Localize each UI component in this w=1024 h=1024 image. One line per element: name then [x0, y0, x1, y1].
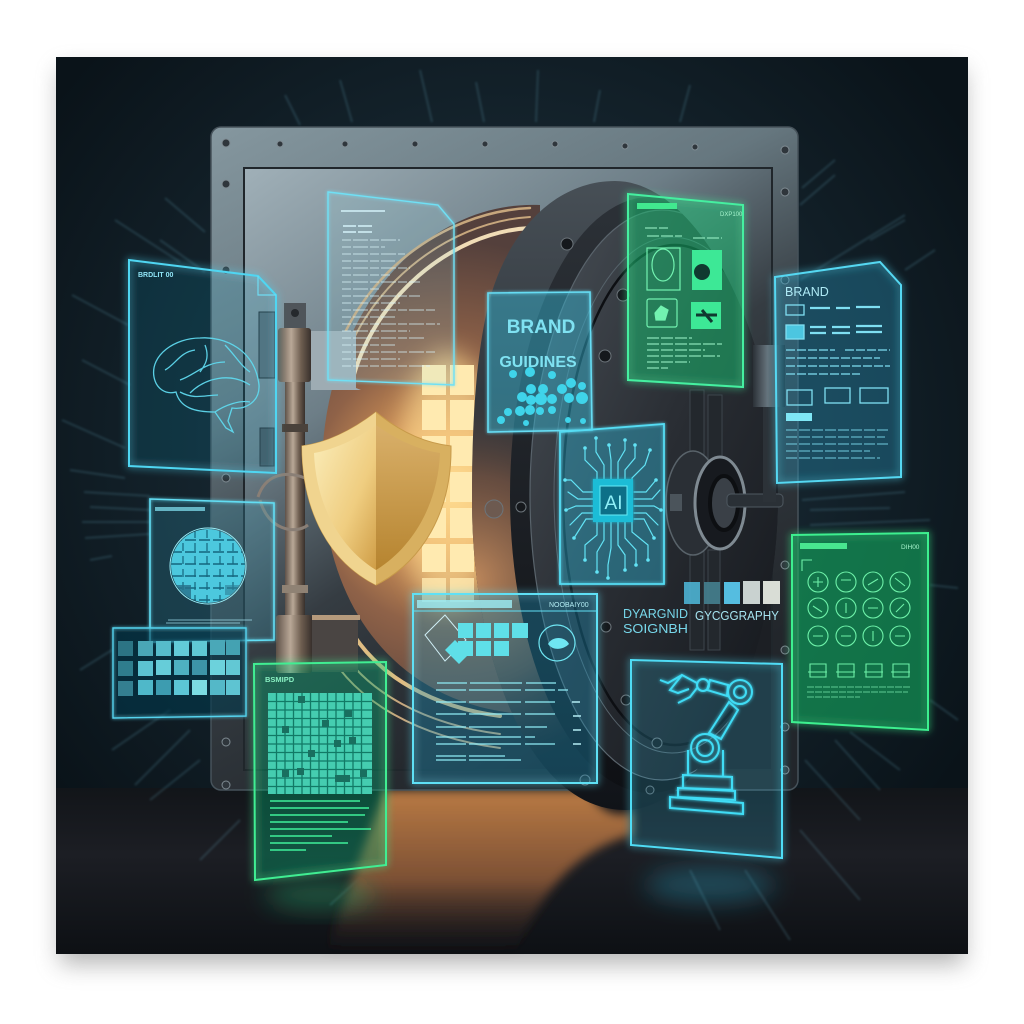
door rings and face: [510, 197, 794, 793]
version label: DXP100: [720, 212, 743, 218]
typography labels: [623, 606, 779, 636]
panel: green icon guide: [628, 194, 743, 387]
guide text lines: [645, 228, 722, 368]
panel heading: BRAND: [785, 285, 829, 299]
header code: NOOBAIY00: [549, 602, 589, 609]
vault inner wall: [244, 168, 772, 770]
light streaks radiating behind the vault: [62, 70, 958, 940]
panel heading: BRAND GUIDINES: [499, 317, 577, 371]
icon: robot arm: [660, 675, 752, 814]
data lines: [436, 683, 568, 760]
gold shield: [302, 412, 451, 585]
panel: green swatch tile guide: [792, 533, 928, 730]
spec thumbnails and lines: [786, 305, 890, 458]
typography labels: DYARGNID: [623, 606, 688, 621]
right hinge: [753, 345, 785, 502]
vault opening with warm light: [322, 205, 540, 715]
locking bars: [690, 390, 722, 650]
panel label: BRDLIT 00: [138, 272, 174, 279]
header bar: [155, 507, 205, 511]
typography labels: SOIGNBH: [623, 621, 688, 636]
scene background: [56, 57, 968, 954]
door bolts: [485, 238, 662, 794]
icon grid: [802, 560, 910, 677]
vault frame: [211, 127, 798, 790]
panel: circle mosaic document: [150, 499, 274, 642]
open vault door: [472, 181, 794, 810]
panel heading: BSMIPD: [265, 675, 295, 684]
vault wheel handle: [666, 451, 783, 555]
circuit traces: [565, 438, 661, 578]
brass door rings: [322, 208, 530, 748]
panel: document sheet: [328, 192, 454, 385]
swatch tiles: [118, 640, 240, 696]
panel: brain document: [129, 260, 276, 473]
frame rivets: [222, 139, 789, 789]
icon matrix: [268, 693, 372, 794]
header bar: [637, 203, 677, 209]
panel: green icon matrix: [254, 662, 386, 880]
mosaic circle: [171, 529, 245, 605]
panel: AI chip: [560, 424, 664, 584]
panel code: DIH00: [901, 544, 920, 551]
panel: robot arm: [631, 660, 782, 858]
panel: colour swatch grid: [113, 628, 246, 718]
chip terminals: [563, 436, 663, 580]
header bar: [417, 600, 512, 608]
sheet text lines: [341, 211, 385, 232]
panel text lines: [807, 687, 910, 697]
floor light beam: [325, 790, 632, 954]
AI chip core: AI: [605, 493, 622, 514]
glowing window grid: [422, 365, 474, 602]
document caption: [166, 620, 252, 623]
panel heading: BRAND GUIDINES: GUIDINES: [499, 354, 577, 371]
diagram: diamond, tiles and dial: [413, 611, 597, 664]
panel header: [800, 543, 847, 549]
panel: brand specification sheet: [775, 262, 901, 483]
green icons: [647, 248, 722, 329]
AI chip core: [593, 479, 633, 522]
colour blob cluster: [497, 367, 588, 426]
backdrop shadow: [60, 70, 964, 964]
floor reflections: [265, 867, 775, 911]
panel heading: BRAND GUIDINES: BRAND: [507, 317, 575, 338]
left hinge assembly: [258, 303, 361, 673]
typography swatches: [623, 581, 780, 636]
panel: brand guidelines: [488, 292, 592, 432]
typography labels: GYCGGRAPHY: [695, 608, 779, 623]
icon: brain: [154, 338, 259, 432]
matrix text lines: [270, 801, 371, 850]
panel: central data sheet: [413, 594, 597, 783]
